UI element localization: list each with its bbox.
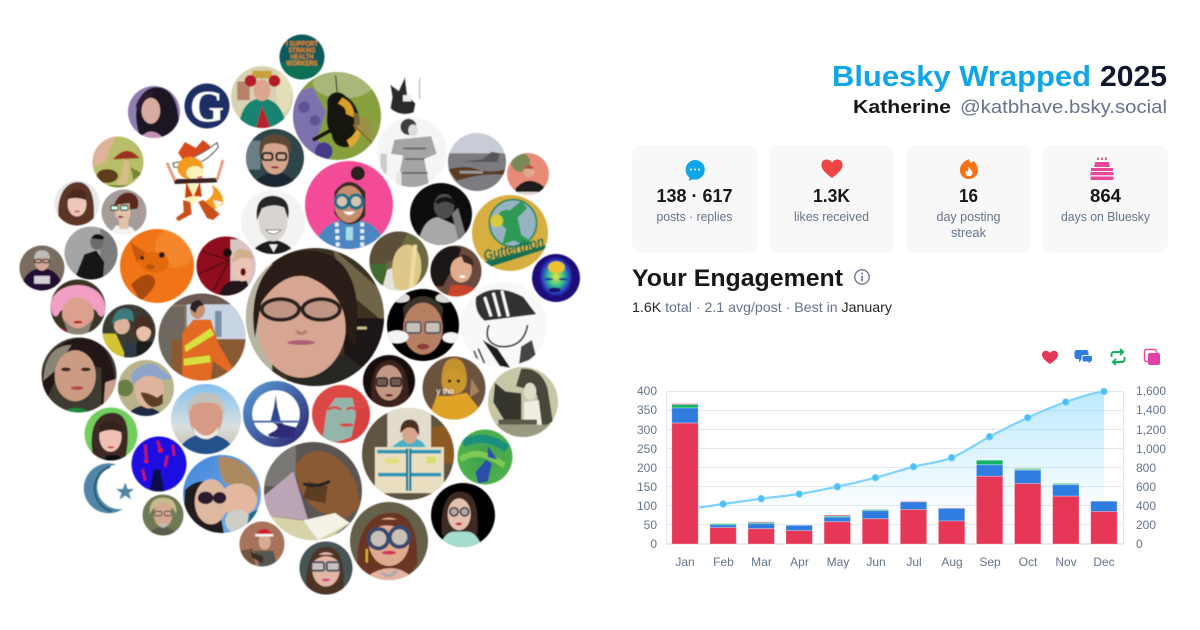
stat card: day posting streak: streak xyxy=(951,226,987,240)
bar: March xyxy=(748,522,774,544)
avatar: strike support badge: STRIKING xyxy=(289,48,315,55)
avatar: pen and ink caricature xyxy=(472,288,537,368)
left axis labels: 400 xyxy=(637,384,657,398)
icon: birthday cake xyxy=(1090,158,1114,180)
avatar: heat map face xyxy=(531,253,581,303)
avatar: brown haired woman with bangs xyxy=(53,179,101,227)
avatar: man in orange hi-vis on ship bridge xyxy=(156,291,250,383)
month labels: Dec xyxy=(1093,555,1115,569)
avatar: Marilyn in red and teal xyxy=(311,384,371,444)
stat card: day posting streak: day posting xyxy=(936,210,1001,224)
avatar: woman with red wall xyxy=(506,152,550,196)
grid lines xyxy=(666,391,1124,544)
right axis labels: 0 xyxy=(1136,537,1143,551)
combined chart: monthly engagement bars and cumulative line xyxy=(637,384,1166,569)
title: 2025 xyxy=(1100,61,1167,93)
icon: heart xyxy=(821,160,843,178)
profile name and handle: Katherine xyxy=(853,96,951,117)
month labels: Nov xyxy=(1055,555,1077,569)
month labels xyxy=(675,555,1115,569)
avatar: woman with red parasol xyxy=(195,235,257,297)
avatar: dark portrait in black and white xyxy=(408,181,474,247)
month labels: Jan xyxy=(675,555,695,569)
right axis labels: 400 xyxy=(1136,499,1156,513)
left axis labels: 0 xyxy=(650,537,657,551)
icon: flame xyxy=(960,159,978,179)
avatar: older person with purple shirt xyxy=(18,244,66,292)
title: Bluesky Wrapped xyxy=(832,61,1091,93)
avatar: smiling man black and white xyxy=(242,190,304,255)
avatar: red-haired woman with large round glasses xyxy=(348,500,430,582)
month labels: Oct xyxy=(1019,555,1038,569)
engagement summary: 1.6K total · 2.1 avg/post · Best in January xyxy=(632,299,892,315)
avatar: woman on black background with teal sweater xyxy=(429,481,497,549)
avatar: white-haired smiling man xyxy=(169,382,243,456)
bar: August xyxy=(938,508,965,544)
avatar: blonde woman from behind xyxy=(368,230,430,292)
avatar: Gutterthon beer badge xyxy=(470,193,550,273)
icon: legend heart xyxy=(1042,351,1058,364)
left axis labels: 50 xyxy=(644,518,657,532)
right axis labels: 1,000 xyxy=(1136,442,1166,456)
stat card: likes received: 1.3K xyxy=(813,186,850,206)
avatar: sepia girl with cat xyxy=(486,365,560,439)
stat card: day posting streak xyxy=(906,145,1031,253)
avatar: bumblebee on lavender xyxy=(291,68,383,162)
stat card: day posting streak: 16 xyxy=(959,186,978,206)
avatar: pink wig with beard xyxy=(49,278,107,337)
avatar: rocky shore landscape xyxy=(447,132,507,192)
avatar: two women outdoors xyxy=(101,303,157,359)
cumulative points xyxy=(720,388,1107,507)
bar: October xyxy=(1014,468,1041,544)
avatar: purple-haired woman xyxy=(127,85,181,139)
avatar: dog lying on a book xyxy=(262,440,364,542)
left axis labels: 200 xyxy=(637,461,657,475)
icon: legend quote xyxy=(1144,350,1160,365)
left axis labels: 250 xyxy=(637,442,657,456)
avatar cluster xyxy=(18,33,581,596)
bar: September xyxy=(976,460,1003,544)
avatar: cartoon fox in cowboy hat xyxy=(167,140,223,221)
avatar: large central selfie, woman with glasses xyxy=(243,245,387,389)
right axis labels: 1,200 xyxy=(1136,423,1166,437)
avatar: Gutterthon beer badge: Gutterthon xyxy=(482,233,546,265)
bar: November xyxy=(1053,483,1079,544)
bar: April xyxy=(786,525,812,544)
left axis labels: 350 xyxy=(637,403,657,417)
avatar: young man with glasses xyxy=(245,128,305,188)
profile name and handle xyxy=(853,96,1167,117)
icon: chat bubble xyxy=(686,160,705,180)
stat card: likes received: likes received xyxy=(794,210,869,224)
bar: December xyxy=(1091,501,1117,544)
avatar: mushroom illustration xyxy=(91,135,145,190)
avatar: strike support badge xyxy=(278,33,326,81)
left axis labels xyxy=(637,384,657,551)
month labels: Feb xyxy=(713,555,734,569)
cumulative line xyxy=(685,392,1104,509)
month labels: Mar xyxy=(751,555,772,569)
profile name and handle: @katbhave.bsky.social xyxy=(960,96,1167,117)
avatar: woman in Santa hat xyxy=(238,520,286,568)
chart legend xyxy=(1042,349,1160,365)
left axis labels: 150 xyxy=(637,480,657,494)
left axis labels: 300 xyxy=(637,423,657,437)
icon: info xyxy=(855,270,869,284)
avatar: blue aquarium with jellyfish xyxy=(130,435,188,493)
stat card: posts and replies: 138 · 617 xyxy=(656,186,732,206)
avatar: green weather map of New Zealand xyxy=(456,428,514,486)
stat card: posts and replies: posts · replies xyxy=(656,210,732,224)
avatar: woman in sunglasses with boy xyxy=(181,453,263,535)
month labels: Apr xyxy=(790,555,809,569)
avatar: memoji with glasses and clouds xyxy=(385,287,461,363)
stacked monthly bars xyxy=(672,404,1117,544)
right axis labels: 200 xyxy=(1136,518,1156,532)
avatar: woman on green background xyxy=(83,406,139,462)
avatar: blue circular spire logo xyxy=(241,379,311,449)
avatar: strike support badge: WORKERS xyxy=(287,60,318,67)
avatar: orange cat xyxy=(118,227,196,305)
stat card: likes received xyxy=(769,145,894,253)
avatar: Guardian G logo: G xyxy=(190,82,224,131)
avatar: etching of witch figure xyxy=(390,77,421,115)
right axis labels: 600 xyxy=(1136,480,1156,494)
avatar: crescent and star xyxy=(84,463,134,513)
avatar: painting of chubby baby: y tho xyxy=(436,387,454,396)
avatar: vintage flapper illustration xyxy=(429,244,483,298)
avatar: woman holding blue-yellow painting xyxy=(360,406,456,502)
avatar: vintage woman with milk bottles xyxy=(378,118,446,188)
avatar: woman with close crop selfie xyxy=(40,336,118,414)
avatar: painting of chubby baby xyxy=(421,355,487,421)
bar: May xyxy=(824,515,850,544)
month labels: Aug xyxy=(941,555,963,569)
avatar: woman with blue glasses, bottom xyxy=(298,540,354,596)
bar: June xyxy=(862,510,889,544)
avatar: pink background woman with blue glasses xyxy=(303,159,395,251)
stat card: days on Bluesky xyxy=(1043,145,1168,253)
bar: February xyxy=(710,524,736,544)
month labels: Jul xyxy=(906,555,922,569)
month labels: Jun xyxy=(866,555,886,569)
month labels: May xyxy=(827,555,849,569)
stat card: posts and replies xyxy=(632,145,757,253)
icon: legend replies xyxy=(1074,350,1092,364)
avatar: white-bearded man with glasses xyxy=(141,493,185,537)
right axis labels: 1,400 xyxy=(1136,403,1166,417)
area under cumulative line xyxy=(685,392,1104,544)
right axis labels xyxy=(1136,384,1166,551)
right axis labels: 800 xyxy=(1136,461,1156,475)
left axis labels: 100 xyxy=(637,499,657,513)
right axis labels: 1,600 xyxy=(1136,384,1166,398)
avatar: Archer cartoon woman xyxy=(100,188,148,236)
month labels: Sep xyxy=(979,555,1001,569)
icon: legend repost xyxy=(1112,349,1124,365)
avatar: strike support badge: I SUPPORT xyxy=(286,41,319,48)
avatar: woman with red flower crown xyxy=(229,64,295,130)
heading: Your Engagement: Your Engagement xyxy=(632,265,843,292)
avatar: strike support badge: HEALTH xyxy=(291,54,313,61)
avatar: woman with glasses, dark hair xyxy=(362,354,416,408)
avatar: man with grey cap xyxy=(117,359,175,417)
bar: July xyxy=(900,501,927,544)
avatar: man in profile, monochrome xyxy=(63,225,119,281)
stat card: days on Bluesky: days on Bluesky xyxy=(1061,210,1151,224)
bar: January xyxy=(672,404,698,544)
stat card: days on Bluesky: 864 xyxy=(1090,186,1121,206)
